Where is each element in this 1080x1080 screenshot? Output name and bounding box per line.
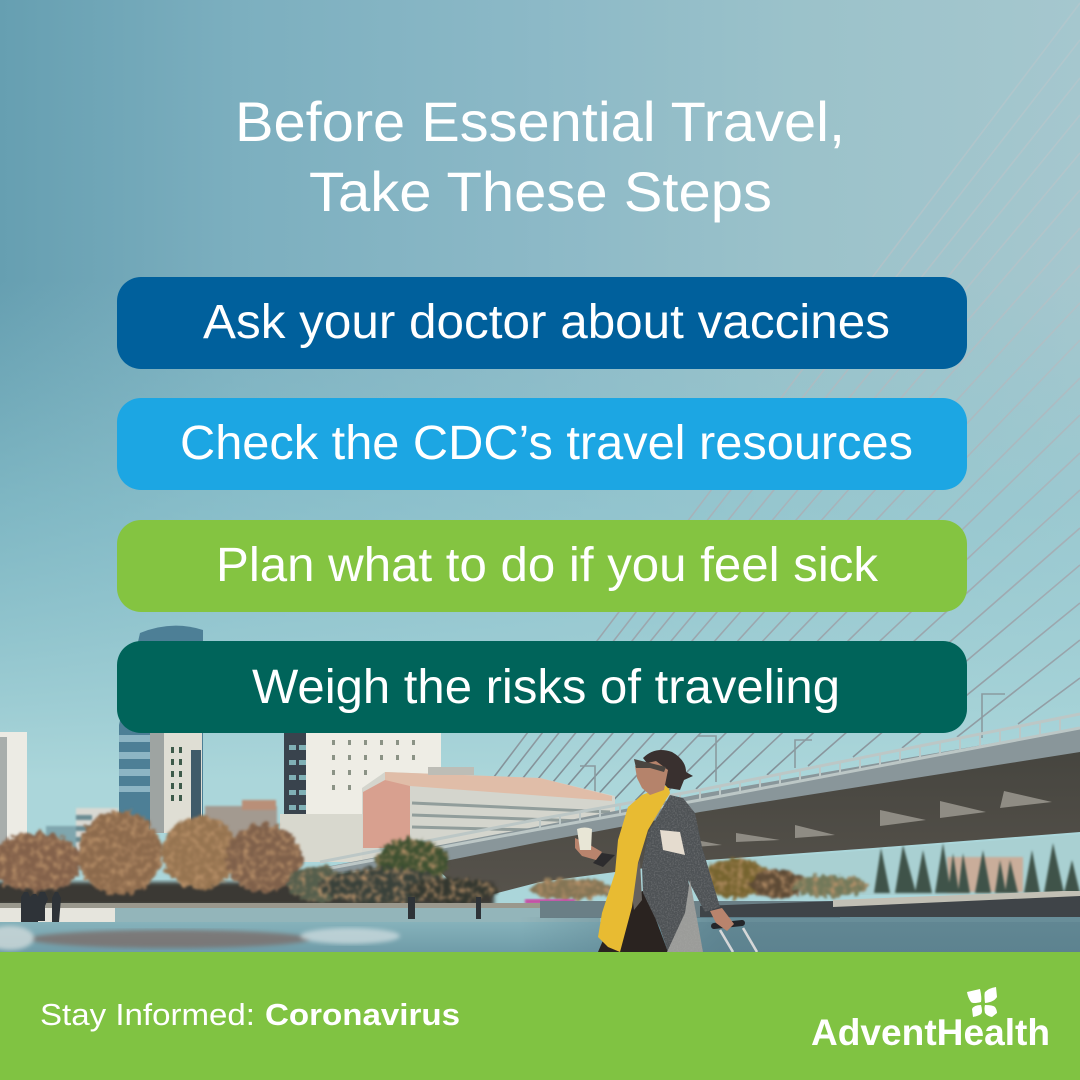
hand and cup (575, 828, 602, 860)
building: dark and white tower (280, 733, 441, 862)
suitcase handle (714, 923, 757, 952)
bag (660, 830, 685, 855)
inner scarf fold (630, 860, 642, 910)
bridge ribs (680, 791, 1052, 848)
title (235, 90, 845, 223)
step 2 pill: CDC resources: Check the CDC’s travel resources (180, 417, 913, 470)
building: pink apartments (362, 767, 615, 860)
lamp posts (580, 694, 1005, 805)
step 3 pill: feeling sick: Plan what to do if you feel sick (216, 539, 879, 592)
step 4 pill: weigh risks: Weigh the risks of traveling (252, 661, 840, 714)
scarf (598, 785, 670, 952)
river water (0, 917, 1080, 952)
skyline buildings (0, 626, 615, 862)
logo mark: four leaves (967, 987, 997, 1017)
AdventHealth logo (811, 987, 1050, 1053)
traveler with yellow scarf and suitcase (575, 750, 757, 952)
step 1 pill: vaccines (117, 277, 967, 369)
footer tagline: Coronavirus (265, 997, 460, 1032)
carrying hand (710, 908, 734, 931)
dark undergrowth (0, 882, 494, 906)
bridge underside (430, 750, 1080, 900)
building: white tower left (0, 732, 27, 862)
coat (642, 795, 720, 952)
logo wordmark: AdventHealth (811, 1012, 1050, 1053)
step 4 pill: weigh risks (117, 641, 967, 733)
trousers (598, 890, 668, 952)
footer tagline (40, 997, 460, 1032)
riverside wall (0, 891, 1080, 923)
step 1 pill: vaccines: Ask your doctor about vaccines (203, 296, 890, 349)
pedestrians (21, 892, 481, 922)
head (634, 750, 693, 795)
step 3 pill: feeling sick (117, 520, 967, 612)
sleeve (593, 853, 615, 867)
footer band (0, 952, 1080, 1080)
bridge cables (447, 3, 1080, 839)
autumn trees (0, 811, 498, 906)
bridge deck (320, 714, 1080, 900)
bridge railing (320, 714, 1080, 870)
step 2 pill: CDC resources (117, 398, 967, 490)
coat lining (667, 880, 703, 952)
far shore trees and cypresses (525, 834, 1080, 904)
building: low blocks (46, 800, 277, 858)
building: glass tower (119, 626, 203, 833)
title: Take These Steps (309, 160, 772, 223)
footer tagline: Stay Informed: (40, 997, 255, 1032)
title: Before Essential Travel, (235, 90, 845, 153)
bridge fascia (320, 728, 1080, 874)
